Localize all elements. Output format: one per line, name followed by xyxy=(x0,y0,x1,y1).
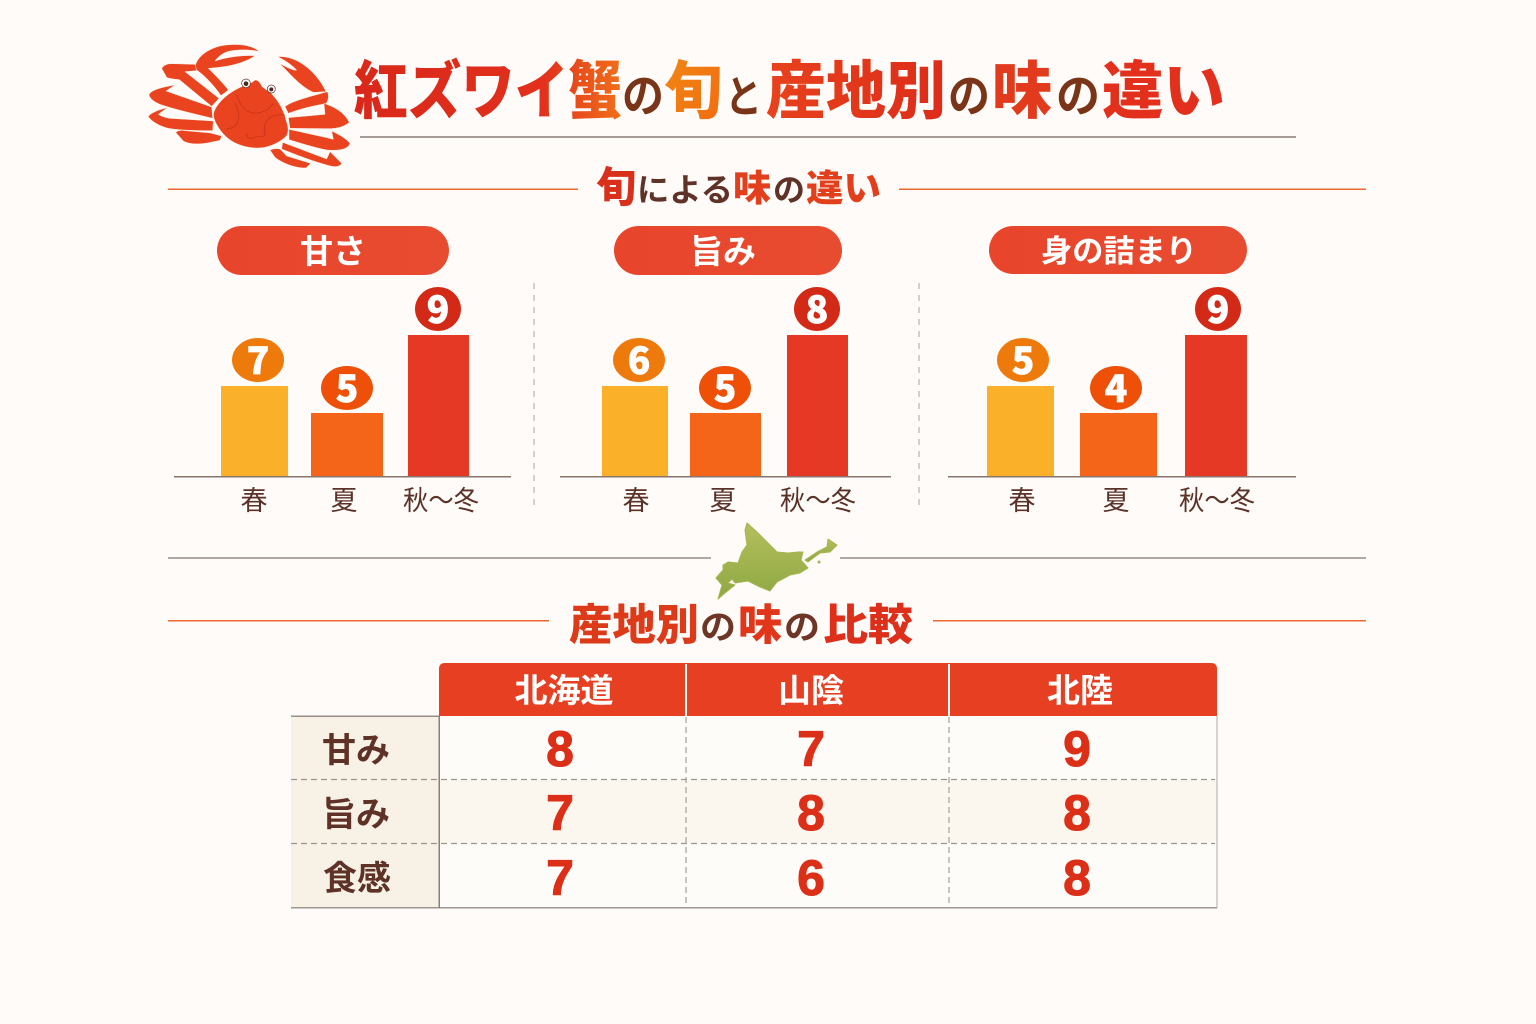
row labels: 旨み xyxy=(322,796,390,834)
heading: regional: 産地別 xyxy=(569,591,699,653)
axis labels: 夏 xyxy=(710,479,736,518)
axis labels: 夏 xyxy=(1102,479,1130,518)
title: と xyxy=(725,61,762,125)
title: 産地別 xyxy=(766,41,946,132)
axis labels: 春 xyxy=(1008,479,1036,518)
value badges: 5 xyxy=(714,359,736,413)
value badges: 6 xyxy=(628,331,650,385)
table header: 山陰 xyxy=(778,664,844,712)
value badges: 8 xyxy=(806,280,828,334)
heading: seasonal xyxy=(168,154,1366,215)
icon: Hokkaido map xyxy=(716,523,837,599)
table values: 7 xyxy=(546,850,574,906)
value badges: 9 xyxy=(427,280,449,334)
panel: sweetness chart xyxy=(174,225,511,518)
value badges: 4 xyxy=(1105,359,1127,413)
axis labels xyxy=(1008,479,1255,518)
pill: 旨み xyxy=(614,225,842,275)
axis labels: 秋～冬 xyxy=(780,479,856,518)
table values: 8 xyxy=(1063,785,1091,841)
value badges xyxy=(613,280,840,413)
heading: seasonal: の xyxy=(773,165,805,211)
pill: 旨み: 旨み xyxy=(690,225,756,273)
panel: meat fullness chart xyxy=(948,226,1296,518)
axis labels: 夏 xyxy=(330,479,358,518)
table values: 8 xyxy=(546,721,574,777)
table header: 北陸 xyxy=(1047,664,1113,712)
table values: 8 xyxy=(1063,850,1091,906)
heading: seasonal: による xyxy=(637,165,733,211)
icon: crab xyxy=(148,45,350,168)
table body xyxy=(439,716,1217,907)
axis labels: 秋～冬 xyxy=(1179,479,1255,518)
axis labels: 春 xyxy=(240,479,268,518)
comparison table xyxy=(291,663,1218,908)
table values: 9 xyxy=(1063,721,1091,777)
row labels: 甘み xyxy=(322,732,390,770)
table values: 6 xyxy=(797,850,825,906)
table values: 7 xyxy=(797,721,825,777)
heading: seasonal: 味 xyxy=(733,158,771,212)
axis labels: 春 xyxy=(622,479,650,518)
title: 違い xyxy=(1102,41,1225,132)
row label cells xyxy=(291,716,439,907)
heading: regional: の xyxy=(784,600,820,649)
bars xyxy=(987,335,1247,476)
axis labels xyxy=(622,479,856,518)
value badges: 9 xyxy=(1207,280,1229,334)
heading: regional: 比較 xyxy=(823,591,913,653)
table values: 7 xyxy=(546,785,574,841)
heading: seasonal: 旬 xyxy=(596,154,636,215)
title: 旬 xyxy=(664,41,722,132)
pill: 身の詰まり: 身の詰まり xyxy=(1041,226,1197,271)
pill: 甘さ: 甘さ xyxy=(300,225,366,273)
panel: umami chart xyxy=(560,225,891,518)
axis labels xyxy=(240,479,479,518)
value badges xyxy=(997,280,1241,413)
value badges: 5 xyxy=(1012,331,1034,385)
table header: 北海道 xyxy=(514,664,614,712)
pill: 身の詰まり xyxy=(989,226,1247,274)
title: の xyxy=(948,60,990,126)
title: の xyxy=(622,60,664,126)
pill: 甘さ xyxy=(217,225,449,275)
table values: 8 xyxy=(797,785,825,841)
bars xyxy=(221,335,469,476)
value badges xyxy=(232,280,461,413)
row labels: 食感 xyxy=(323,860,391,898)
axis labels: 秋～冬 xyxy=(403,479,479,518)
table header xyxy=(439,663,1217,716)
value badges: 7 xyxy=(247,331,269,385)
heading: regional: の xyxy=(700,600,736,649)
heading: regional: 味 xyxy=(738,591,782,653)
title: の xyxy=(1056,60,1100,126)
heading: regional xyxy=(168,591,1366,653)
table values xyxy=(546,721,1091,906)
row labels xyxy=(322,732,391,898)
value badges: 5 xyxy=(336,359,358,413)
title xyxy=(354,41,1225,132)
title: 紅ズワイ蟹 xyxy=(354,41,622,132)
title: 味 xyxy=(992,41,1052,132)
heading: seasonal: 違い xyxy=(806,158,881,212)
bars xyxy=(602,335,848,476)
